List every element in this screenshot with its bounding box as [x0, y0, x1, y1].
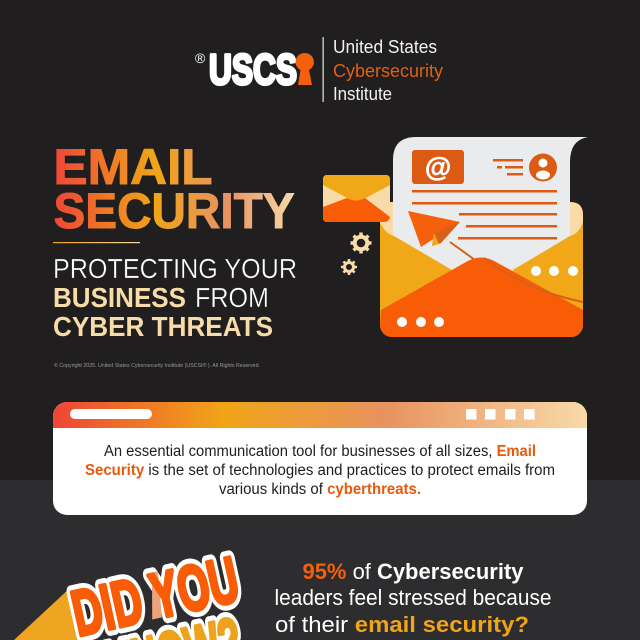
envelope back: [380, 202, 583, 337]
envelope side panel left: [380, 224, 452, 310]
icon: paper plane: [408, 211, 475, 260]
illustration: open envelope with letter: [380, 137, 588, 337]
dots right: [531, 266, 578, 276]
registered mark: ®: [195, 50, 206, 66]
plane trail: [484, 258, 583, 302]
logo name: Cybersecurity: [333, 61, 443, 81]
subtitle: BUSINESS: [53, 282, 186, 313]
letter text lines: [412, 190, 557, 240]
dots left: [397, 317, 444, 327]
header squares: [466, 409, 534, 420]
logo name: Institute: [333, 84, 392, 104]
card text: [85, 443, 555, 498]
icon: large gear: [350, 232, 372, 254]
card header bar: [53, 402, 587, 428]
logo name: [333, 37, 443, 104]
badge inner shadow: [142, 571, 168, 620]
logo wordmark: USCS: [209, 46, 297, 94]
speed lines: [493, 159, 523, 176]
icon: small gear: [341, 259, 357, 275]
statistic text: 95% of Cybersecurity: [302, 559, 524, 584]
badge shadow: [14, 588, 80, 640]
card text: An essential communication tool for businesses of all sizes, Email: [104, 443, 536, 460]
envelope side panel right: [513, 224, 583, 310]
envelope inner lining: [380, 202, 583, 290]
card text: various kinds of cyberthreats.: [219, 481, 421, 498]
statistic text: [274, 559, 552, 637]
letter sheet: [393, 137, 588, 270]
subtitle: CYBER THREATS: [53, 311, 273, 342]
envelope front flap: [380, 258, 583, 337]
at sign badge: @: [425, 152, 451, 182]
logo name: United States: [333, 37, 437, 57]
copyright: © Copyright 2025. United States Cybersecurity Institute (USCSI® ). All Rights Reserved.: [54, 362, 260, 369]
statistic text: leaders feel stressed because: [274, 585, 552, 610]
card text: Security is the set of technologies and practices to protect emails from: [85, 462, 555, 479]
subtitle: [53, 253, 297, 342]
statistic text: of their email security?: [275, 612, 529, 637]
badge text outline: [65, 543, 258, 640]
icon: small envelope: [323, 175, 390, 222]
title: Email Security: [54, 139, 294, 239]
at sign badge: [412, 150, 464, 184]
subtitle: PROTECTING YOUR: [53, 253, 297, 284]
did you know badge: [14, 543, 258, 640]
logo: USCSI: [195, 37, 443, 104]
title: Email Security: SECURITY: [54, 183, 294, 239]
icon: keyhole: [296, 53, 314, 85]
panel: definition card: [53, 402, 587, 515]
icon: user avatar: [529, 154, 557, 182]
title: Email Security: EMAIL: [54, 139, 212, 195]
header pill: [70, 409, 152, 419]
subtitle: FROM: [195, 282, 269, 313]
